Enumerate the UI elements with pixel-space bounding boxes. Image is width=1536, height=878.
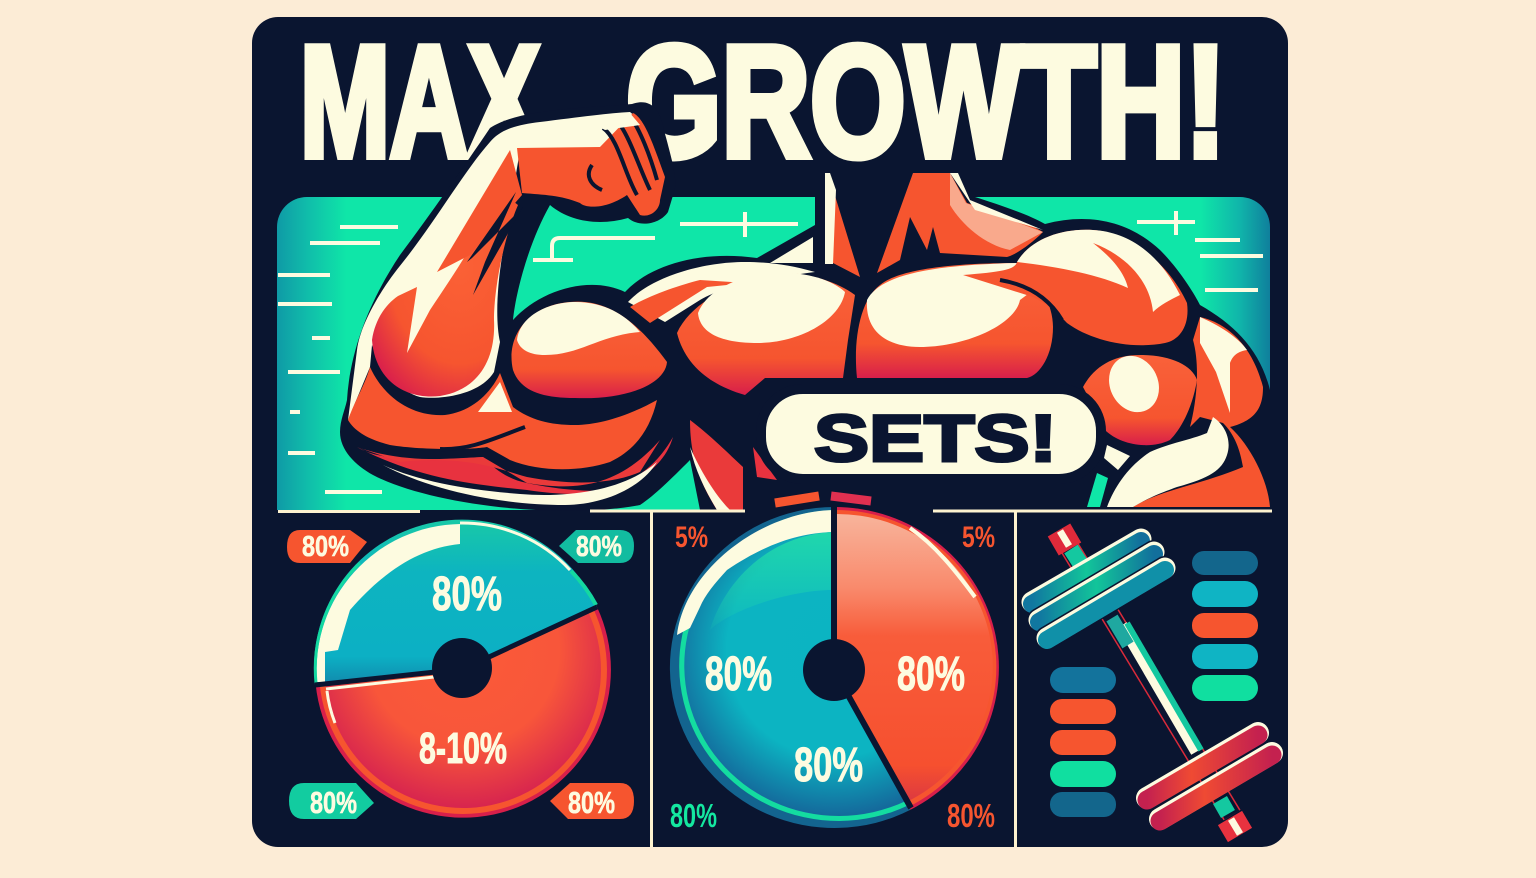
label: 8-10%: 8-10% xyxy=(419,724,507,773)
red slice outer rim xyxy=(834,507,999,810)
top plates xyxy=(1032,539,1141,602)
dark line between pectoral and deltoid xyxy=(1000,280,1062,320)
callout bubble: SETS!: SETS! xyxy=(814,401,1057,475)
red slice cream rim xyxy=(326,677,434,723)
upper shoulder muscle strip xyxy=(628,262,815,322)
green background band with motion lines xyxy=(277,197,1270,510)
teal slice xyxy=(314,520,597,685)
gap cream shard xyxy=(1104,445,1130,470)
biceps highlight xyxy=(517,302,640,355)
trapezius muscle xyxy=(877,173,1043,273)
panel: right donut chart xyxy=(670,496,999,834)
left pectoral muscle xyxy=(677,273,855,395)
right round muscle xyxy=(1083,355,1197,445)
flexed muscular arm and torso illustration xyxy=(340,102,1270,511)
corner label: 80% bottom right: 80% xyxy=(947,797,995,834)
right round muscle highlight xyxy=(1100,348,1168,420)
small cream shard xyxy=(770,237,813,263)
callout bubble: SETS! xyxy=(761,389,1101,479)
panel: left donut chart xyxy=(287,520,634,820)
forearm upper streak xyxy=(437,150,522,272)
teal top green tint xyxy=(710,532,833,630)
slice dividers xyxy=(834,506,911,808)
title: MAX GROWTH!: MAX xyxy=(300,14,540,190)
torso and arm dark silhouette xyxy=(340,102,1270,511)
donut hole xyxy=(432,638,492,698)
panel: dumbbell and pills xyxy=(1032,530,1272,835)
fist finger lines xyxy=(589,116,657,195)
title: MAX GROWTH!: GROWTH! xyxy=(626,14,1226,190)
donut hole xyxy=(803,639,865,701)
underarm cream strip xyxy=(383,462,657,505)
tag: red 80% bottom-right xyxy=(550,783,634,820)
trapezius cream strip xyxy=(950,173,1043,250)
lower pec fragment xyxy=(690,420,743,510)
title: MAX GROWTH! xyxy=(300,14,1226,190)
teal slice outer xyxy=(670,507,910,828)
red slice orange ring xyxy=(320,609,607,814)
corner label: 5% left: 5% xyxy=(675,521,708,554)
horizontal divider line xyxy=(278,510,1272,513)
forearm cream base xyxy=(348,112,642,420)
handle xyxy=(1068,545,1232,815)
corner label: 5% right: 5% xyxy=(962,521,995,554)
biceps xyxy=(512,302,667,398)
icon: dumbbell xyxy=(1032,530,1272,835)
teal cream ring xyxy=(677,510,833,635)
lower arm crease xyxy=(440,427,525,449)
teal slice xyxy=(684,515,906,816)
lower arm muscle xyxy=(348,367,657,469)
top tick marks xyxy=(775,496,819,503)
dark poster panel xyxy=(252,17,1288,847)
forearm tendon lines xyxy=(467,192,523,295)
teal rim green xyxy=(315,563,360,683)
forearm muscle xyxy=(372,195,518,397)
top end cap xyxy=(1059,530,1070,549)
green gap near bubble xyxy=(1087,473,1108,507)
red cream streak xyxy=(910,528,975,597)
bottom end cap xyxy=(1230,818,1240,835)
underarm muscle xyxy=(357,437,673,494)
right pectoral muscle xyxy=(856,263,1053,378)
pills: right column xyxy=(1192,551,1258,701)
red slice xyxy=(834,514,993,802)
left spike muscle xyxy=(825,173,860,277)
pills: left column xyxy=(1050,667,1116,817)
bottom plates xyxy=(1147,733,1258,798)
slice dividers xyxy=(315,607,597,685)
teal slice cream ring xyxy=(317,524,460,682)
corner label: 80% bottom left: 80% xyxy=(670,797,717,834)
red orange ring xyxy=(834,510,996,807)
deltoid muscle xyxy=(963,230,1188,345)
elbow white glint xyxy=(478,382,512,412)
tag: red 80% bottom-right: 80% xyxy=(568,785,615,820)
teal green ring xyxy=(679,510,908,821)
label: 80% left: 80% xyxy=(705,648,772,701)
lower cream muscle xyxy=(1107,417,1229,507)
left pectoral highlight xyxy=(698,272,845,343)
red slice outer rim xyxy=(316,607,611,818)
underarm orange xyxy=(357,440,660,486)
tag: red 80% top-left: 80% xyxy=(302,531,349,563)
fist knuckle cream xyxy=(590,113,640,130)
lat cream highlight xyxy=(1200,317,1247,413)
vertical dividers xyxy=(652,512,1016,847)
right pectoral highlight xyxy=(867,263,1040,347)
tag: green 80% top-right: 80% xyxy=(576,531,622,563)
right lat muscle xyxy=(1133,317,1270,507)
tag: green 80% bottom-left xyxy=(289,783,374,820)
fist xyxy=(517,113,665,216)
label: 80% top: 80% xyxy=(432,568,502,621)
tag: green 80% bottom-left: 80% xyxy=(310,785,357,820)
red slice xyxy=(326,611,601,808)
label: 80% bottom: 80% xyxy=(794,739,863,792)
label: 80% right: 80% xyxy=(897,648,965,701)
deltoid highlight xyxy=(1017,230,1180,312)
